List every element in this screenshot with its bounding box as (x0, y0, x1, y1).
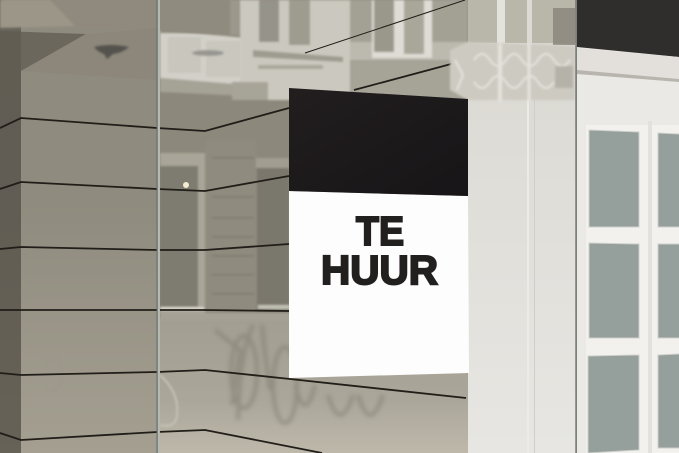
reflection: bicycles (215, 325, 383, 423)
sign text (321, 208, 438, 293)
shelf lines (0, 0, 466, 453)
reflection: white balcony (160, 30, 268, 97)
reflection: facade with windows (160, 0, 468, 100)
ceiling and shadowed corner (0, 0, 157, 453)
glass panel edges (156, 0, 577, 453)
sign: black upper panel (289, 88, 468, 196)
glass panel right of sign (468, 0, 576, 453)
reflection: bicycle wheel (45, 357, 177, 426)
door frame and facade (576, 0, 679, 453)
sign text: HUUR (321, 247, 438, 293)
sign: TE HUUR (289, 88, 469, 378)
ceiling camera (94, 45, 129, 59)
ceiling light reflection (183, 182, 189, 188)
reflection: ornate balustrade (450, 42, 575, 102)
sign text: TE (356, 208, 404, 254)
reflection: ground floor window and door (160, 140, 290, 320)
sign: white lower panel (289, 191, 469, 378)
door panes (588, 130, 679, 453)
